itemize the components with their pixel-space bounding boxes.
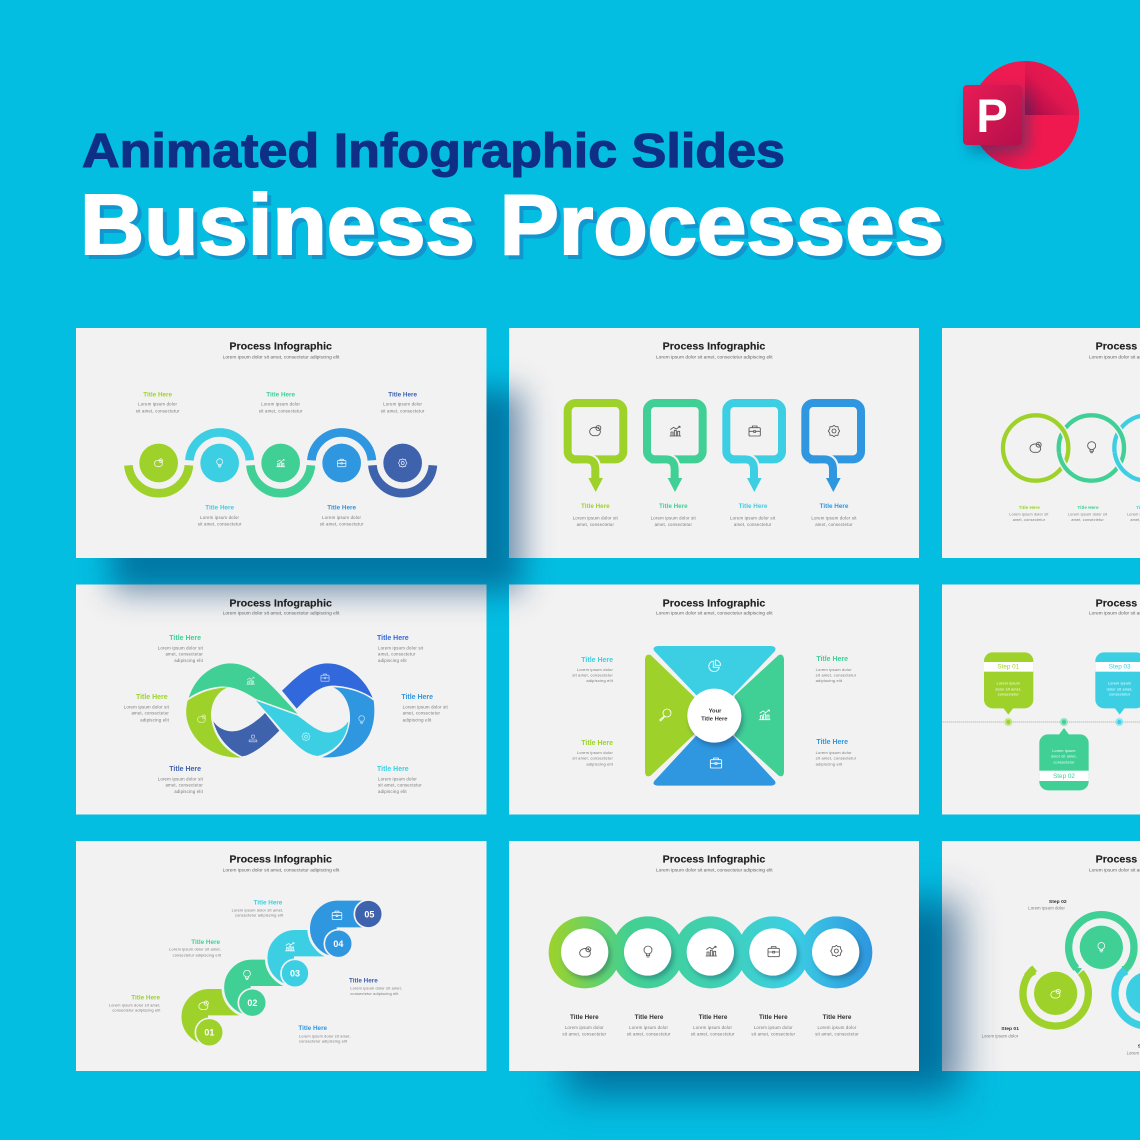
- label: middle right: Lorem ipsum dolor sit: [403, 704, 449, 709]
- gradient chain: [549, 916, 872, 988]
- pin label three: [730, 503, 776, 527]
- label: step five: Lorem ipsum dolor: [383, 402, 423, 407]
- pin label one: Title Here: [581, 503, 610, 510]
- quadrant chart: [645, 646, 784, 786]
- center title: Your: [709, 708, 722, 714]
- subheading: Lorem ipsum dolor sit amet, consectetur adipiscing elit: [656, 354, 774, 359]
- arrow ring: cyan: [1115, 967, 1140, 1026]
- label: lower left: Title Here: [169, 766, 201, 773]
- label: middle right: adipiscing elit: [403, 717, 432, 722]
- label: step 01: Lorem ipsum dolor: [982, 1033, 1019, 1038]
- numbered circles: [195, 900, 382, 1046]
- label: step 03: Lorem ipsum dolor sit amet,: [232, 908, 283, 912]
- label: top right: Lorem ipsum dolor: [816, 667, 852, 672]
- label: step 05: Lorem ipsum dolor sit amet,: [350, 986, 402, 990]
- callout: step 02: dolor sit amet,: [1051, 755, 1077, 759]
- callout: step 03: Lorem ipsum: [1108, 682, 1131, 686]
- label: step 02: Step 02: [1049, 899, 1067, 905]
- label: upper right: amet, consectetur: [378, 652, 416, 657]
- ring label two: amet, consectetur: [1071, 518, 1104, 522]
- ring label one: [1009, 505, 1049, 522]
- infinity icons: [198, 674, 365, 742]
- label: bottom right: Title Here: [816, 739, 848, 746]
- heading: Process Infographic: [663, 342, 766, 353]
- callout: step 03: consectetur: [1109, 693, 1131, 697]
- pin label three: amet, consectetur: [734, 522, 772, 527]
- ring label two: [1068, 505, 1107, 522]
- circle icons: [580, 945, 842, 957]
- slide backgrounds: upper layer: [76, 328, 919, 1071]
- label: lower left: adipiscing elit: [174, 789, 204, 794]
- label: top right: sit amet, consectetur: [816, 672, 857, 677]
- label four: sit amet, consectetur: [751, 1031, 796, 1036]
- label: top left: adipiscing elit: [586, 678, 614, 683]
- pin label two: Lorem ipsum dolor sit: [651, 515, 697, 520]
- step numbers: 01: [204, 1028, 214, 1038]
- icon: PowerPoint logo: [963, 61, 1079, 169]
- label: lower left: [158, 766, 204, 794]
- callout: step 01: [984, 652, 1033, 715]
- panel: timeline steps slide: [943, 598, 1140, 790]
- callout: step 02: consectetur: [1053, 760, 1075, 764]
- pin label four: [811, 503, 857, 527]
- wave arcs: [128, 432, 433, 493]
- ring label one: Title Here: [1019, 505, 1040, 510]
- subheading: Lorem ipsum dolor sit amet, consectetur adipiscing elit: [656, 611, 774, 616]
- panel: arrow pins slide: [568, 342, 861, 527]
- label: middle left: Lorem ipsum dolor sit: [124, 704, 170, 709]
- label: top right: Title Here: [816, 656, 848, 663]
- label: step 02: [1028, 899, 1067, 910]
- label: lower right: Lorem ipsum dolor: [378, 776, 417, 781]
- label: step 01: [982, 1026, 1019, 1038]
- staircase icons: [199, 911, 342, 1010]
- label three: Title Here: [699, 1014, 728, 1021]
- ring label two: Title Here: [1077, 505, 1099, 510]
- timeline line: [943, 721, 1140, 723]
- label: step 02: [169, 939, 222, 957]
- interlocked rings: [1003, 415, 1140, 481]
- label: step one: Lorem ipsum dolor: [138, 402, 178, 407]
- callout: step 01: dolor sit amet,: [995, 687, 1021, 691]
- label two: sit amet, consectetur: [627, 1031, 671, 1036]
- label two: Lorem ipsum dolor: [629, 1025, 669, 1030]
- label: lower right: sit amet, consectetur: [378, 783, 422, 788]
- heading: Process Infographic: [229, 342, 333, 353]
- label: bottom left: Lorem ipsum dolor: [577, 750, 613, 755]
- panel: infinity loop slide: [124, 598, 449, 794]
- label: top left: Title Here: [581, 657, 613, 664]
- timeline nodes: [1004, 718, 1123, 726]
- label: step 01: consectetur adipiscing elit: [112, 1009, 161, 1013]
- label: upper left: Title Here: [169, 635, 201, 642]
- label one: Lorem ipsum dolor: [565, 1025, 604, 1030]
- label: top left: Lorem ipsum dolor: [577, 667, 613, 672]
- label: top left: sit amet, consectetur: [572, 672, 613, 677]
- label: middle right: [401, 694, 449, 722]
- label: upper left: adipiscing elit: [174, 658, 204, 663]
- center title: Title Here: [701, 717, 728, 723]
- label: step four: [320, 505, 364, 527]
- label: step 04: [298, 1025, 351, 1044]
- label: step three: Title Here: [266, 391, 296, 398]
- label: step three: sit amet, consectetur: [259, 408, 303, 413]
- label four: Title Here: [759, 1014, 788, 1021]
- label: lower left: Lorem ipsum dolor sit: [158, 776, 204, 781]
- pin label three: Title Here: [739, 503, 768, 510]
- ring label three: [1127, 505, 1140, 522]
- label three: Lorem ipsum dolor: [693, 1025, 733, 1030]
- label: bottom right: sit amet, consectetur: [816, 756, 857, 761]
- subheading: Lorem ipsum dolor sit amet, consectetur adipiscing elit: [223, 867, 340, 872]
- panel: four quadrant slide: [572, 598, 857, 786]
- label: upper left: amet, consectetur: [165, 652, 203, 657]
- callout: step 01: consectetur: [998, 693, 1019, 697]
- callout: step 03: dolor sit amet,: [1107, 687, 1133, 691]
- ring label one: Lorem ipsum dolor sit: [1009, 512, 1049, 516]
- label: lower left: amet, consectetur: [165, 783, 203, 788]
- label: top left: [572, 657, 614, 683]
- ring icons: [1030, 442, 1096, 453]
- callout: step 03: [1095, 652, 1140, 715]
- label: step one: Title Here: [143, 391, 173, 398]
- staircase segments: [180, 899, 368, 1046]
- label: bottom right: [816, 739, 857, 766]
- label two: [627, 1014, 671, 1036]
- slide backgrounds: lower layer: [76, 328, 1140, 1071]
- label: upper right: Lorem ipsum dolor sit: [378, 645, 424, 650]
- label: lower right: Title Here: [377, 766, 409, 773]
- step circles: [139, 444, 422, 482]
- callout: step 02: Step 02: [1053, 773, 1075, 780]
- label three: sit amet, consectetur: [691, 1031, 735, 1036]
- label: step 05: [349, 977, 402, 996]
- heading: Process Infographic: [229, 598, 333, 609]
- label: middle left: amet, consectetur: [131, 711, 169, 716]
- heading: Process Infographic: [663, 855, 766, 866]
- pin label four: amet, consectetur: [815, 522, 853, 527]
- label: top right: [816, 656, 857, 683]
- callout: step 01: Lorem ipsum: [997, 682, 1020, 686]
- arrow ring: teal: [1069, 915, 1134, 974]
- step numbers: 02: [247, 998, 257, 1008]
- label one: [562, 1014, 607, 1036]
- label: middle right: Title Here: [401, 694, 433, 701]
- label: upper left: Lorem ipsum dolor sit: [158, 645, 204, 650]
- panel: circular arrows slide: [982, 855, 1140, 1056]
- label: step 01: Title Here: [131, 995, 160, 1002]
- label: step 02: consectetur adipiscing elit: [173, 953, 222, 957]
- title shadow: Business Processes: Business Processes: [84, 182, 948, 277]
- label five: Title Here: [823, 1014, 852, 1021]
- subheading: Lorem ipsum dolor sit amet, consectetur adipiscing elit: [223, 611, 340, 616]
- label: upper left: [158, 635, 204, 663]
- panel: stacked staircase slide: [109, 855, 402, 1046]
- label: step 02: Lorem ipsum dolor sit amet,: [169, 948, 221, 952]
- callout: step 02: Lorem ipsum: [1052, 749, 1076, 753]
- label: top right: adipiscing elit: [816, 678, 843, 683]
- center title: [701, 708, 728, 723]
- title: Animated Infographic Slides: Animated Infographic Slides: [82, 125, 785, 178]
- label: middle left: [124, 694, 170, 722]
- label: step one: sit amet, consectetur: [136, 408, 180, 413]
- pin label four: Title Here: [820, 503, 849, 510]
- label: step five: sit amet, consectetur: [381, 408, 425, 413]
- label: bottom left: [572, 740, 614, 766]
- white circles: [561, 928, 859, 976]
- label: step 03: [1127, 1044, 1140, 1056]
- label: step 05: consectetur adipiscing elit: [350, 992, 399, 996]
- label: step five: Title Here: [388, 391, 418, 398]
- panel: gradient circles slide: [549, 855, 872, 1036]
- label: upper right: Title Here: [377, 635, 409, 642]
- label one: sit amet, consectetur: [562, 1031, 607, 1036]
- label: step 03: consectetur adipiscing elit: [235, 914, 284, 918]
- label three: [691, 1014, 735, 1036]
- pin label four: Lorem ipsum dolor sit: [811, 515, 857, 520]
- quadrant icons: [660, 660, 770, 768]
- label: step two: sit amet, consectetur: [198, 522, 242, 527]
- label: step one: [136, 391, 180, 413]
- label four: [751, 1014, 796, 1036]
- label: step 01: Step 01: [1001, 1026, 1019, 1032]
- label: step two: Title Here: [205, 505, 235, 512]
- label: bottom left: Title Here: [581, 740, 613, 747]
- step numbers: 04: [333, 939, 343, 949]
- arrow ring: green: [1023, 967, 1088, 1026]
- label: middle left: Title Here: [136, 694, 168, 701]
- label: lower right: [377, 766, 422, 794]
- label: step four: Title Here: [327, 505, 357, 512]
- pin label one: [573, 503, 619, 527]
- ring icons: [1051, 943, 1105, 998]
- icon: PowerPoint logo: P: [976, 89, 1008, 142]
- title: Business Processes: Business Processes: [80, 178, 944, 273]
- label: step five: [381, 391, 425, 413]
- label: step 01: Lorem ipsum dolor sit amet,: [109, 1003, 161, 1007]
- ring label one: amet, consectetur: [1013, 518, 1046, 522]
- white circle shadows: [564, 932, 862, 979]
- subheading: Lorem ipsum dolor sit amet, consectetur adipiscing elit: [656, 867, 774, 872]
- step numbers: [204, 909, 374, 1038]
- heading: Process Infographic: [229, 855, 333, 866]
- panel: wave process slide: [128, 342, 433, 527]
- callout: step 01: Step 01: [997, 664, 1020, 671]
- step icons: [154, 459, 407, 467]
- label: step 01: [109, 995, 161, 1013]
- pin label two: amet, consectetur: [655, 522, 692, 527]
- infinity chart: [186, 663, 374, 757]
- label: upper right: [377, 635, 424, 663]
- pin label two: [651, 503, 697, 527]
- label: upper right: adipiscing elit: [378, 658, 407, 663]
- label: step four: Lorem ipsum dolor: [322, 515, 362, 520]
- label: bottom right: adipiscing elit: [816, 761, 843, 766]
- label: lower right: adipiscing elit: [378, 789, 407, 794]
- callout: step 03: Step 03: [1109, 664, 1131, 671]
- pin label two: Title Here: [659, 503, 688, 510]
- label: step three: Lorem ipsum dolor: [261, 402, 301, 407]
- heading: Process Infographic: [663, 598, 766, 609]
- label five: sit amet, consectetur: [815, 1031, 859, 1036]
- label: step 02: Title Here: [191, 939, 220, 946]
- pin label three: Lorem ipsum dolor sit: [730, 515, 776, 520]
- label five: Lorem ipsum dolor: [818, 1025, 857, 1030]
- pin label one: Lorem ipsum dolor sit: [573, 515, 619, 520]
- label: step 03: Title Here: [254, 900, 283, 907]
- label: step two: [198, 505, 242, 527]
- ring label two: Lorem ipsum dolor sit: [1068, 512, 1107, 516]
- label: step four: sit amet, consectetur: [320, 522, 364, 527]
- label: step 05: Title Here: [349, 977, 378, 984]
- label: step 04: consectetur adipiscing elit: [299, 1040, 348, 1044]
- cast shadows: [112, 390, 960, 1095]
- panel: interlocked rings slide: [1003, 342, 1140, 522]
- step numbers: 05: [364, 909, 374, 919]
- label five: [815, 1014, 859, 1036]
- label: step 04: Lorem ipsum dolor sit amet,: [299, 1034, 351, 1038]
- pin icons: [590, 425, 840, 437]
- label: middle left: adipiscing elit: [140, 717, 170, 722]
- pin label one: amet, consectetur: [577, 522, 614, 527]
- label one: Title Here: [570, 1014, 599, 1021]
- label: step 03: [232, 900, 284, 918]
- label: step three: [259, 391, 303, 413]
- label: step two: Lorem ipsum dolor: [200, 515, 240, 520]
- arrow pin frames: [568, 403, 861, 492]
- callout: step 02: [1039, 728, 1089, 790]
- label: step 04: Title Here: [298, 1025, 328, 1032]
- label: bottom left: sit amet, consectetur: [572, 756, 613, 761]
- label: bottom right: Lorem ipsum dolor: [816, 750, 852, 755]
- label: middle right: amet, consectetur: [403, 711, 441, 716]
- step numbers: 03: [290, 969, 300, 979]
- label: bottom left: adipiscing elit: [586, 761, 614, 766]
- label: step 02: Lorem ipsum dolor: [1028, 905, 1065, 910]
- subheading: Lorem ipsum dolor sit amet, consectetur adipiscing elit: [223, 354, 340, 359]
- label four: Lorem ipsum dolor: [754, 1025, 793, 1030]
- label two: Title Here: [635, 1014, 664, 1021]
